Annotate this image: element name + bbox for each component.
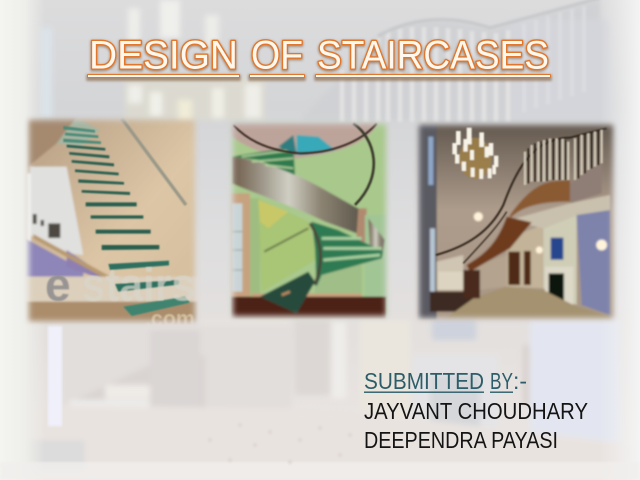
title: Design of Staircases: STAIRCASES [317,34,549,78]
photo: floating glass staircase [25,116,198,325]
e-stairs watermark [46,266,194,324]
e-stairs watermark: stairs [82,259,195,311]
title: Design of Staircases: DESIGN [89,34,238,78]
stair window strip [48,326,62,426]
floor speckle [208,423,352,464]
author name: Deependra Payasi: DEEPENDRA PAYASI [364,427,558,453]
title: Design of Staircases: OF [251,35,303,79]
submitted by line: BY [490,368,513,394]
e-stairs watermark: .com [145,306,195,332]
title: Design of Staircases: STAIRCASES [317,35,549,79]
chandelier [452,128,498,179]
title: Design of Staircases: OF [251,34,303,78]
title: Design of Staircases: DESIGN [89,35,238,79]
submitted by credits [364,368,588,453]
photo: green spiral staircase [229,120,390,320]
title: Design of Staircases [88,34,550,79]
author name: Jayvant Choudhary: JAYVANT CHOUDHARY [364,398,588,424]
e-stairs watermark: e [45,259,71,311]
wall lights [474,212,607,254]
photo: grand hall staircase with chandelier [410,115,620,325]
submitted by line: :- [513,368,527,394]
submitted by line: SUBMITTED [364,368,484,394]
